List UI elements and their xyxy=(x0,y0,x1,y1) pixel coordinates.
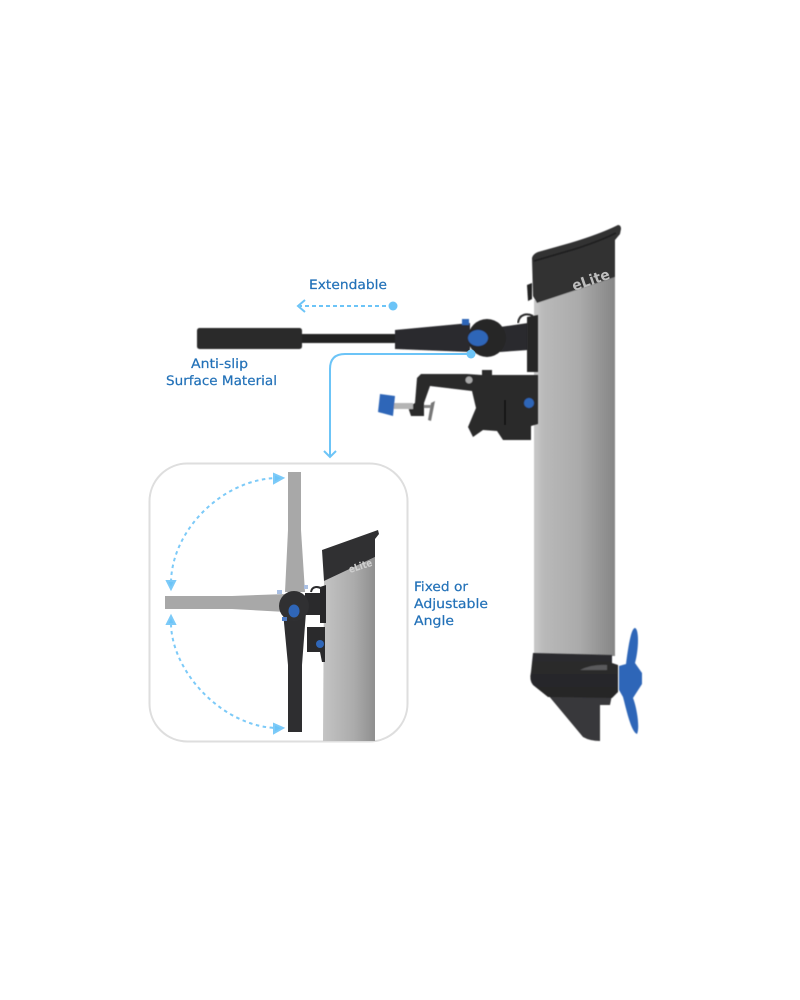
inset logo: eLite xyxy=(348,558,374,576)
propeller xyxy=(619,628,642,734)
inset joint xyxy=(279,591,309,621)
mounting bracket xyxy=(518,314,538,372)
inset tabs xyxy=(277,590,282,594)
label: Anti-slip Surface Material: Surface Material xyxy=(166,374,277,389)
motor body xyxy=(527,225,621,656)
heading: Extendable: Extendable xyxy=(309,278,387,293)
label: Fixed or Adjustable Angle xyxy=(414,580,488,629)
blue screw knob xyxy=(378,394,395,416)
inset blue dot xyxy=(316,640,324,648)
label: Anti-slip Surface Material xyxy=(166,357,277,389)
clamp xyxy=(378,370,538,440)
forearm xyxy=(395,323,470,352)
small tab xyxy=(462,319,469,325)
arrow: upper rotation xyxy=(167,474,283,589)
ghost horizontal handle xyxy=(165,594,286,612)
label: Fixed or Adjustable Angle: Fixed or xyxy=(414,580,469,595)
arrow: lower rotation xyxy=(167,616,283,733)
inset motor body xyxy=(323,557,375,741)
silver tube xyxy=(534,268,615,656)
label: Fixed or Adjustable Angle: Angle xyxy=(414,614,454,629)
skeg xyxy=(548,695,612,741)
joint xyxy=(468,319,506,357)
arm to bracket xyxy=(500,323,528,352)
panel: adjustable angle inset xyxy=(150,464,408,742)
inset lower box xyxy=(307,627,325,662)
top cap xyxy=(532,225,621,303)
label: Fixed or Adjustable Angle: Adjustable xyxy=(414,597,488,612)
label: Anti-slip Surface Material: Anti-slip xyxy=(191,357,248,372)
clamp bolt xyxy=(393,403,413,409)
inset active handle xyxy=(283,612,306,732)
clamp pad xyxy=(428,401,435,421)
side latch xyxy=(527,283,532,301)
inset arm to bracket xyxy=(305,593,322,615)
ghost vertical handle xyxy=(285,472,305,592)
blue knob xyxy=(468,330,488,346)
blue dot xyxy=(524,398,534,408)
pod highlight xyxy=(580,665,607,670)
inset blue knob xyxy=(288,604,300,618)
clamp arm and jaw xyxy=(408,370,538,440)
arrow: extendable xyxy=(298,300,398,312)
lower pod and skeg xyxy=(530,653,618,741)
inset frame xyxy=(150,464,408,742)
pod xyxy=(530,653,618,698)
arrow: handle to inset xyxy=(324,350,476,457)
clamp slot xyxy=(504,400,506,425)
inset bracket xyxy=(320,585,326,623)
shaft xyxy=(302,334,396,343)
inset cap xyxy=(322,530,379,581)
clamp pivot xyxy=(466,376,472,384)
cap highlight xyxy=(534,233,616,261)
telescopic handle xyxy=(197,319,528,357)
brand logo: eLite xyxy=(570,267,612,295)
grip xyxy=(197,328,302,349)
